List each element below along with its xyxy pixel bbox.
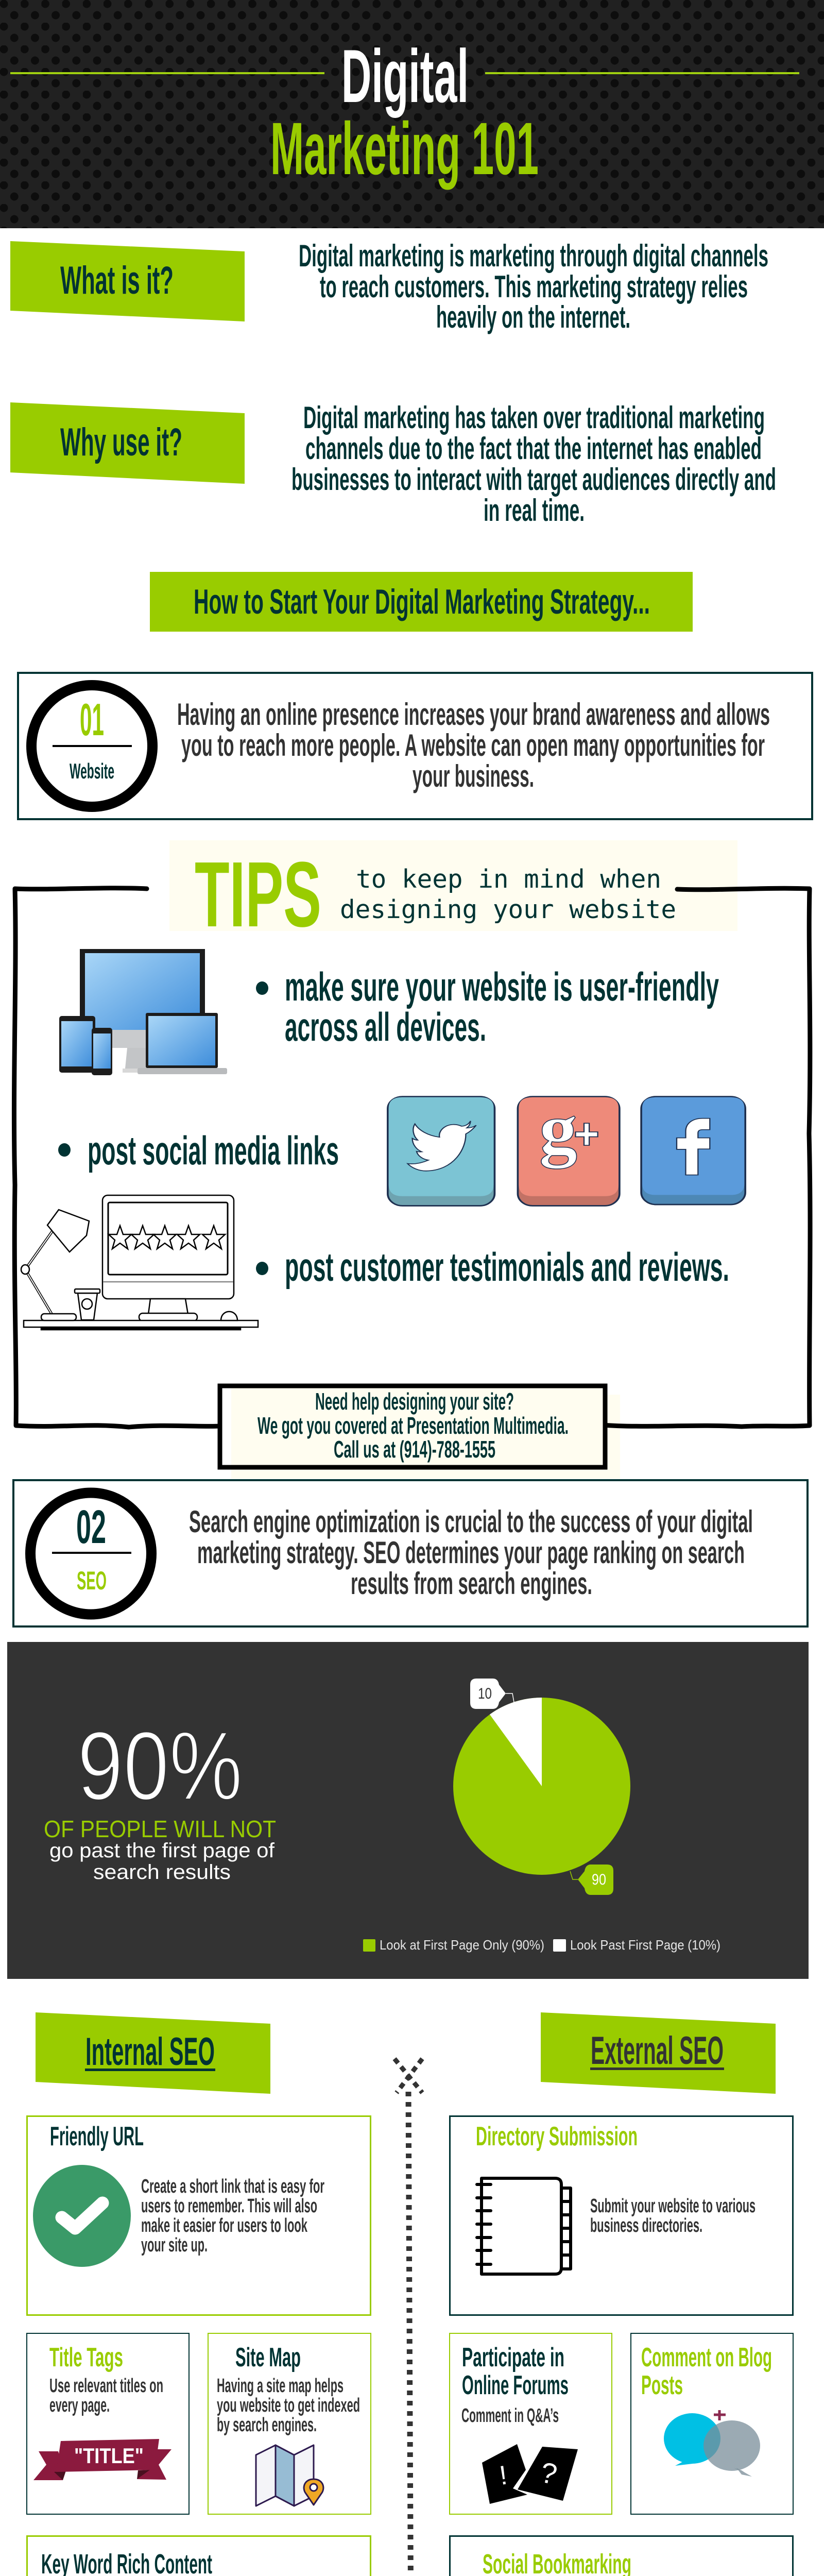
what is it text block bbox=[299, 239, 768, 334]
panel: site map: you website to get indexed bbox=[217, 2395, 360, 2416]
panel: social bookmarking bbox=[450, 2536, 793, 2576]
directory text bbox=[590, 2195, 756, 2236]
statistic caption bbox=[44, 1816, 276, 1884]
why use it banner bbox=[10, 402, 245, 484]
icons: social media buttons bbox=[388, 1089, 745, 1206]
icon: title ribbon bbox=[33, 2439, 171, 2480]
tips heading: designing your website bbox=[340, 895, 676, 924]
step 02 text: results from search engines. bbox=[351, 1566, 592, 1601]
step badge 02: SEO bbox=[77, 1566, 107, 1595]
panel: 90 percent statistic bbox=[7, 1642, 809, 1979]
why use it text block: in real time. bbox=[484, 493, 585, 528]
panel: comment on blog posts: Posts bbox=[641, 2370, 683, 2400]
panel: site map: Having a site map helps bbox=[217, 2375, 344, 2397]
panel: online forums: Participate in bbox=[462, 2343, 564, 2372]
tip: social media links: post social media links bbox=[88, 1128, 339, 1173]
how to start heading bbox=[150, 572, 693, 632]
step badge 01 bbox=[31, 685, 152, 807]
what is it banner bbox=[10, 241, 245, 321]
panel: online forums bbox=[450, 2333, 612, 2514]
step badge 01: Website bbox=[70, 759, 114, 783]
icon: map with pin bbox=[256, 2445, 323, 2506]
panel: friendly url bbox=[27, 2116, 371, 2315]
tip: user friendly: across all devices. bbox=[285, 1004, 486, 1049]
tip: social media links bbox=[58, 1128, 339, 1173]
step badge 02: 02 bbox=[76, 1501, 106, 1553]
friendly url text bbox=[141, 2176, 324, 2256]
icon: exclamation and question cards: ! bbox=[497, 2460, 509, 2491]
directory text: business directories. bbox=[590, 2215, 702, 2236]
icon: twitter bbox=[388, 1096, 494, 1206]
panel: friendly url: Friendly URL bbox=[50, 2122, 144, 2151]
callout: need help: We got you covered at Presentation Multimedia. bbox=[258, 1412, 569, 1439]
icon: notebook bbox=[477, 2178, 571, 2274]
friendly url text: your site up. bbox=[141, 2234, 208, 2256]
title: Digital bbox=[341, 34, 469, 118]
step 01 text bbox=[177, 697, 770, 793]
external seo heading bbox=[541, 2012, 776, 2094]
icon: responsive devices bbox=[59, 949, 227, 1075]
panel: title tags: Title Tags bbox=[49, 2343, 123, 2372]
panel: directory submission bbox=[450, 2116, 793, 2315]
panel: directory submission: Directory Submission bbox=[476, 2122, 638, 2151]
what is it banner: What is it? bbox=[60, 259, 174, 302]
panel: site map: by search engines. bbox=[217, 2414, 317, 2436]
data label 90 bbox=[578, 1865, 613, 1895]
why use it text block bbox=[291, 400, 776, 528]
internal seo heading: Internal SEO bbox=[85, 2030, 215, 2074]
panel: title tags bbox=[27, 2333, 189, 2514]
pie legend bbox=[363, 1937, 720, 1953]
icon: title ribbon: "TITLE" bbox=[74, 2444, 144, 2468]
panel: title tags: every page. bbox=[49, 2395, 110, 2416]
data label 10: 10 bbox=[478, 1685, 492, 1702]
tips heading: to keep in mind when bbox=[356, 865, 661, 894]
icon: desk with review monitor bbox=[21, 1195, 258, 1330]
panel: title tags: Use relevant titles on bbox=[49, 2375, 163, 2397]
data label 90: 90 bbox=[592, 1871, 606, 1888]
friendly url text: users to remember. This will also bbox=[141, 2195, 317, 2217]
friendly url text: make it easier for users to look bbox=[141, 2215, 307, 2236]
statistic caption: search results bbox=[93, 1861, 231, 1884]
icon: exclamation and question cards bbox=[482, 2444, 578, 2504]
panel: key word rich content bbox=[27, 2536, 371, 2576]
vertical dotted divider with x mark bbox=[394, 2059, 422, 2576]
icon: facebook bbox=[641, 1096, 745, 1205]
step badge 02 bbox=[30, 1493, 151, 1615]
panel: site map: Site Map bbox=[235, 2343, 301, 2372]
what is it text block: heavily on the internet. bbox=[436, 300, 630, 334]
header band bbox=[0, 0, 824, 228]
pie legend: Look at First Page Only (90%) bbox=[380, 1937, 544, 1953]
callout: need help bbox=[218, 1383, 607, 1469]
friendly url text: Create a short link that is easy for bbox=[141, 2176, 324, 2197]
title: Marketing 101 bbox=[270, 107, 539, 190]
callout background bbox=[231, 1395, 620, 1479]
step badge 01: 01 bbox=[80, 694, 104, 745]
icon: google plus: g bbox=[539, 1089, 577, 1169]
tips panel frame bbox=[14, 888, 810, 1427]
panel: comment on blog posts bbox=[631, 2333, 793, 2514]
title bbox=[270, 34, 539, 190]
pie chart 90/10 bbox=[453, 1679, 630, 1895]
statistic caption: OF PEOPLE WILL NOT bbox=[44, 1816, 276, 1842]
panel: online forums: Online Forums bbox=[462, 2370, 569, 2400]
big number 90%: 90% bbox=[77, 1711, 243, 1821]
statistic caption: go past the first page of bbox=[49, 1839, 275, 1862]
panel: site map bbox=[208, 2333, 371, 2514]
icon: check mark bbox=[33, 2165, 131, 2267]
panel: step 02 seo bbox=[13, 1480, 808, 1626]
panel: online forums: Comment in Q&A’s bbox=[461, 2405, 559, 2427]
pie legend: Look Past First Page (10%) bbox=[570, 1937, 720, 1953]
why use it banner: Why use it? bbox=[60, 420, 182, 464]
tips heading: TIPS bbox=[195, 843, 321, 946]
data label 10 bbox=[470, 1679, 506, 1709]
callout: need help: Call us at (914)-788-1555 bbox=[334, 1436, 495, 1463]
panel: step 01 website bbox=[18, 673, 812, 819]
step 01 text: your business. bbox=[413, 759, 534, 793]
internal seo heading bbox=[36, 2012, 270, 2094]
callout: need help: Need help designing your site? bbox=[315, 1388, 514, 1415]
step 02 text bbox=[189, 1504, 753, 1601]
tips heading background bbox=[169, 840, 737, 931]
icon: speech bubbles bbox=[664, 2410, 760, 2477]
tips heading bbox=[195, 843, 676, 946]
tip: user friendly bbox=[256, 964, 719, 1049]
icon: google plus bbox=[518, 1089, 620, 1206]
icon: exclamation and question cards: ? bbox=[538, 2455, 560, 2490]
